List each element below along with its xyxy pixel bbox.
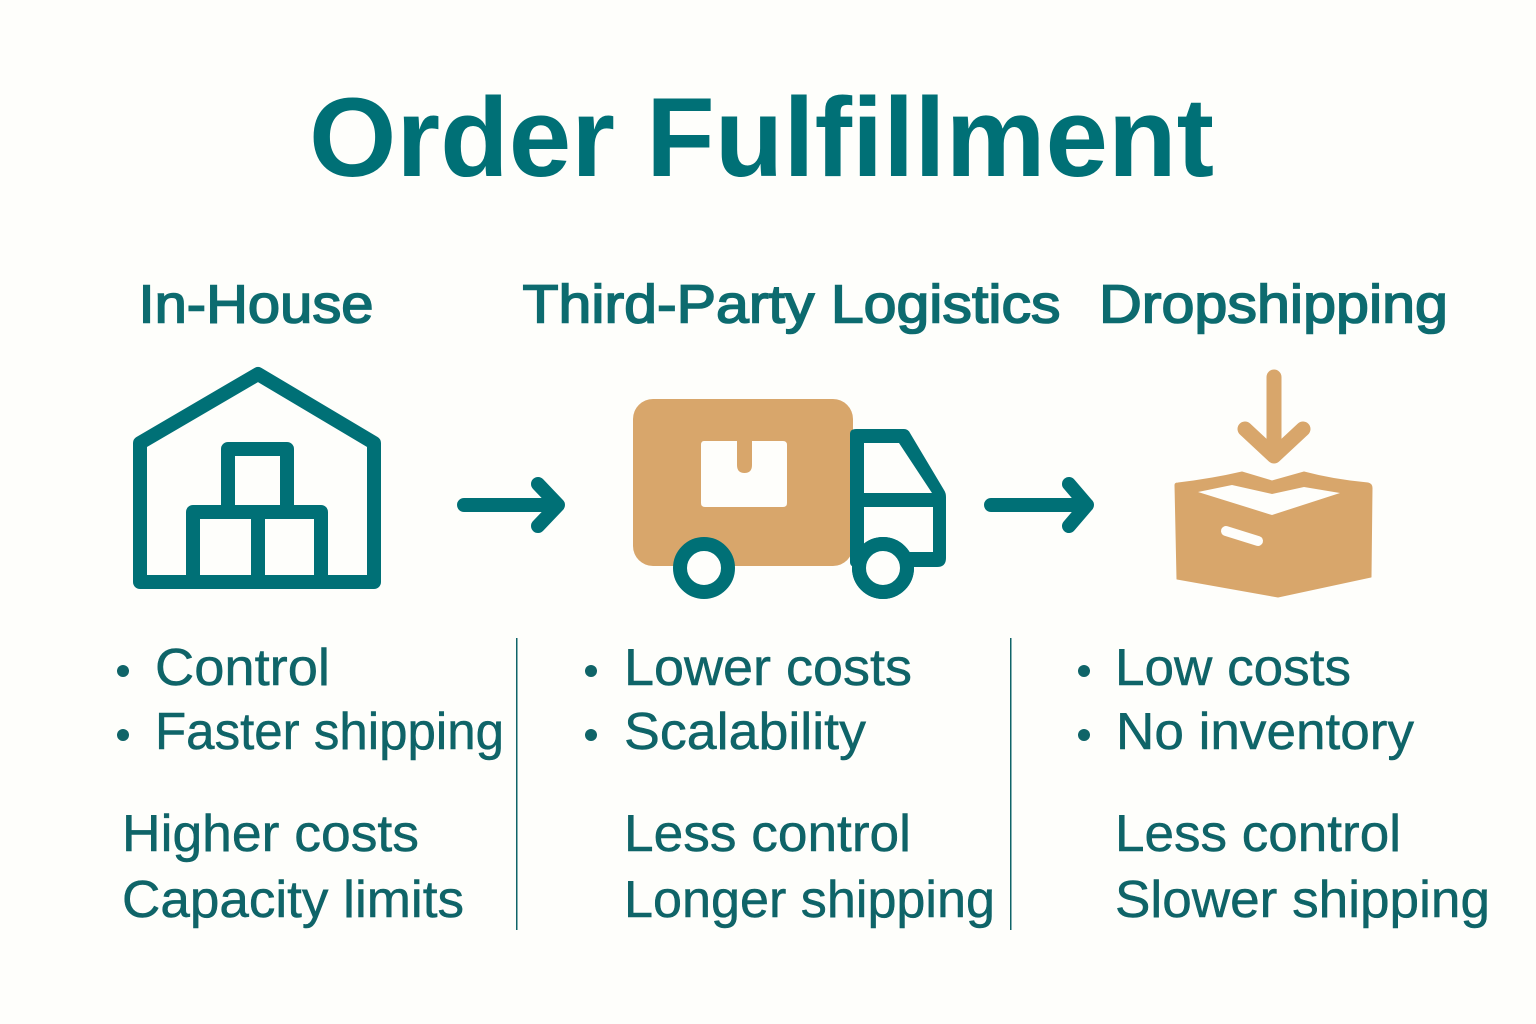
arrow: third-party to dropshipping bbox=[991, 484, 1087, 526]
down arrow bbox=[1245, 377, 1303, 456]
divider left bbox=[516, 638, 518, 930]
bullet bbox=[585, 729, 597, 741]
pro: Lower costs bbox=[624, 639, 912, 697]
con: Slower shipping bbox=[1115, 871, 1490, 929]
icon: warehouse with boxes bbox=[140, 374, 374, 582]
front wheel housing bbox=[852, 537, 914, 599]
con: Less control bbox=[624, 805, 911, 863]
bullet bbox=[585, 665, 597, 677]
bullet bbox=[1078, 729, 1090, 741]
arrow: in-house to third-party bbox=[464, 484, 558, 526]
pro: Faster shipping bbox=[155, 703, 504, 761]
box opening bbox=[1198, 485, 1340, 515]
icon: delivery truck bbox=[633, 399, 946, 599]
column: dropshipping list bbox=[1078, 639, 1490, 929]
con: Higher costs bbox=[122, 805, 419, 863]
box body bbox=[1175, 472, 1372, 597]
bullet bbox=[117, 729, 129, 741]
pro: Low costs bbox=[1115, 639, 1351, 697]
divider right bbox=[1010, 638, 1012, 930]
bullet bbox=[117, 665, 129, 677]
column: third-party list bbox=[585, 639, 995, 929]
heading: Dropshipping: Dropshipping bbox=[1099, 274, 1448, 334]
column: in-house list bbox=[117, 639, 504, 929]
con: Less control bbox=[1115, 805, 1401, 863]
pro: Scalability bbox=[624, 703, 866, 761]
bullet bbox=[1078, 665, 1090, 677]
truck cargo body bbox=[633, 399, 853, 566]
title: Order Fulfillment bbox=[309, 75, 1214, 200]
truck cab bbox=[850, 429, 946, 567]
heading: In-House: In-House bbox=[138, 274, 374, 334]
parcel on truck bbox=[701, 441, 787, 507]
con: Longer shipping bbox=[624, 871, 995, 929]
rear wheel bbox=[680, 544, 728, 592]
front wheel bbox=[859, 544, 907, 592]
icon: open box with down arrow bbox=[1175, 377, 1372, 597]
pro: Control bbox=[155, 639, 330, 697]
heading: Third-Party Logistics: Third-Party Logistics bbox=[522, 274, 1060, 334]
box handle bbox=[1226, 531, 1258, 541]
con: Capacity limits bbox=[122, 871, 464, 929]
pro: No inventory bbox=[1116, 703, 1414, 761]
